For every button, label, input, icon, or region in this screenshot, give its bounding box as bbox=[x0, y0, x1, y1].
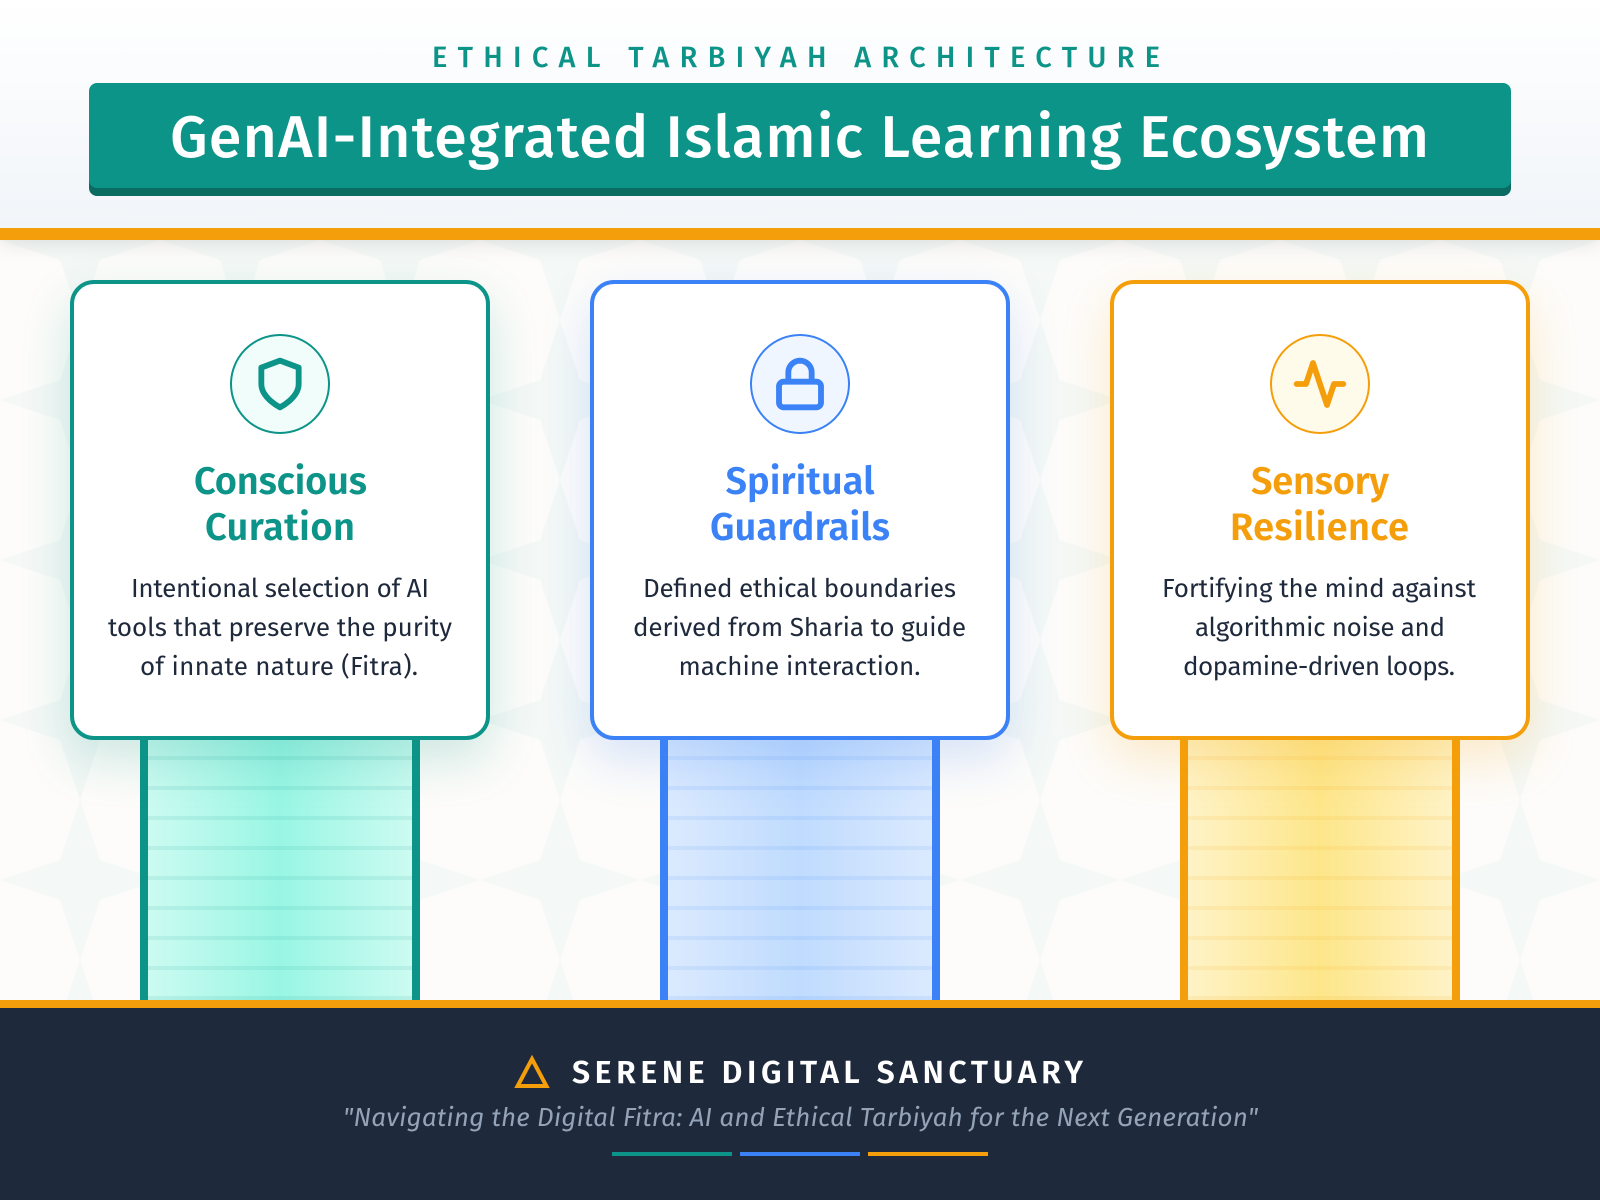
header bbox=[0, 0, 1600, 240]
icon: activity pulse bbox=[1270, 334, 1370, 434]
accent bar: amber bbox=[868, 1152, 988, 1156]
description bbox=[1162, 573, 1477, 682]
accent bar: blue bbox=[740, 1152, 860, 1156]
brand heading: SERENE DIGITAL SANCTUARY bbox=[572, 1054, 1083, 1092]
heading: Resilience bbox=[1230, 505, 1409, 551]
description: Fortifying the mind against bbox=[1162, 573, 1477, 604]
pillar: amber bbox=[1180, 730, 1460, 1000]
description bbox=[108, 573, 452, 682]
icon: triangle bbox=[514, 1054, 550, 1088]
description bbox=[633, 573, 966, 682]
tagline: "Navigating the Digital Fitra: AI and Ethical Tarbiyah for the Next Generation" bbox=[343, 1102, 1259, 1133]
description: tools that preserve the purity bbox=[108, 612, 452, 643]
heading bbox=[710, 459, 890, 551]
description: dopamine-driven loops. bbox=[1183, 651, 1455, 682]
description: of innate nature (Fitra). bbox=[140, 651, 418, 682]
pillar: teal bbox=[140, 730, 420, 1000]
heading bbox=[194, 459, 367, 551]
description: Defined ethical boundaries bbox=[643, 573, 956, 604]
panel: Conscious Curation bbox=[70, 280, 490, 740]
pillar: blue bbox=[660, 730, 940, 1000]
panel: Spiritual Guardrails bbox=[590, 280, 1010, 740]
icon: shield bbox=[230, 334, 330, 434]
heading bbox=[1230, 459, 1409, 551]
title banner: GenAI-Integrated Islamic Learning Ecosystem bbox=[170, 102, 1429, 173]
footer bbox=[0, 1000, 1600, 1200]
description: derived from Sharia to guide bbox=[633, 612, 966, 643]
icon: lock bbox=[750, 334, 850, 434]
description: algorithmic noise and bbox=[1195, 612, 1445, 643]
heading: Spiritual bbox=[726, 459, 875, 505]
panel: Sensory Resilience bbox=[1110, 280, 1530, 740]
description: Intentional selection of AI bbox=[131, 573, 429, 604]
heading: Curation bbox=[205, 505, 355, 551]
description: machine interaction. bbox=[678, 651, 920, 682]
title banner bbox=[89, 83, 1511, 188]
heading: Guardrails bbox=[710, 505, 890, 551]
heading: Sensory bbox=[1251, 459, 1390, 505]
eyebrow heading: ETHICAL TARBIYAH ARCHITECTURE bbox=[432, 40, 1160, 75]
heading: Conscious bbox=[194, 459, 367, 505]
accent bar: teal bbox=[612, 1152, 732, 1156]
